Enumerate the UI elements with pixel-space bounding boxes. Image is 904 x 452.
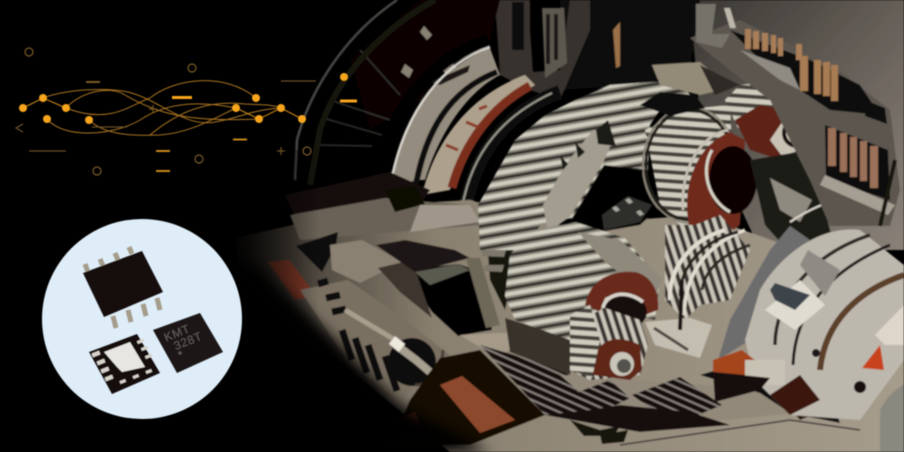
red friction band bbox=[452, 86, 530, 188]
chip: QFN pad side bbox=[89, 334, 160, 394]
casing column bbox=[495, 0, 590, 100]
flywheel inner band bbox=[392, 48, 500, 185]
SOIC body bbox=[83, 251, 163, 317]
chip marking: KMT bbox=[162, 321, 192, 345]
blade bbox=[718, 226, 810, 360]
housing upper strip bbox=[285, 172, 430, 228]
copper column bbox=[613, 22, 620, 68]
bright dashes bbox=[172, 98, 357, 101]
wave curves bbox=[43, 81, 281, 135]
red gear ring bbox=[687, 132, 745, 240]
small gear striped left bbox=[570, 305, 600, 378]
SOIC leads bbox=[85, 247, 160, 328]
lower left gear bbox=[505, 222, 660, 340]
ring markers bbox=[25, 48, 311, 175]
lower right channels bbox=[560, 375, 830, 428]
red crescent bbox=[585, 272, 658, 315]
gear teeth top small bbox=[640, 92, 705, 116]
transmission cutaway photo bbox=[235, 0, 904, 452]
QFN thermal pad bbox=[104, 342, 145, 372]
gear hole bbox=[709, 146, 757, 214]
small gear bbox=[570, 308, 648, 380]
flywheel tan band bbox=[422, 75, 535, 195]
top right slots bbox=[690, 4, 900, 226]
chips bbox=[83, 247, 223, 394]
center hole bbox=[570, 165, 662, 232]
dim dashes bbox=[86, 81, 100, 83]
red oil bbox=[713, 350, 780, 380]
lower housing bbox=[235, 200, 904, 452]
white drum bbox=[745, 229, 904, 420]
chip: QFN marked side bbox=[153, 313, 223, 373]
right edge bbox=[880, 385, 904, 452]
chip: QFN marked side: 328T bbox=[172, 329, 204, 353]
left fade overlay bbox=[230, 150, 320, 452]
lower left shadow bbox=[225, 255, 490, 452]
chip badge circle bbox=[42, 219, 242, 419]
dark right structure bbox=[750, 150, 835, 270]
channels left bbox=[300, 280, 450, 400]
medium dashes bbox=[156, 140, 247, 171]
center drum bbox=[665, 215, 750, 320]
upper structure dark zone bbox=[560, 0, 700, 90]
flywheel outer arc bbox=[295, 0, 397, 180]
orange data wave graphic bbox=[16, 48, 357, 175]
plus and chevron marks bbox=[16, 105, 285, 155]
chip: SOIC package bbox=[83, 247, 163, 328]
right gear bbox=[645, 105, 735, 225]
QFN body bbox=[89, 334, 160, 394]
central block channels bbox=[460, 332, 520, 355]
shaft joint bbox=[388, 338, 436, 386]
spoke structures bbox=[350, 0, 500, 130]
shiny ring around gear bbox=[465, 92, 560, 210]
bottom red chamber bbox=[390, 350, 545, 445]
wave nodes bbox=[19, 73, 348, 124]
QFN contacts bbox=[92, 339, 152, 384]
QFN top body bbox=[153, 313, 223, 373]
wave connectors bbox=[23, 98, 302, 119]
gear crown bbox=[543, 130, 613, 232]
housing channels bbox=[296, 232, 338, 272]
upper right gear bbox=[725, 80, 792, 128]
red blocks bbox=[268, 260, 312, 300]
upper big gear bbox=[478, 80, 690, 250]
upper right casing bbox=[690, 0, 904, 250]
